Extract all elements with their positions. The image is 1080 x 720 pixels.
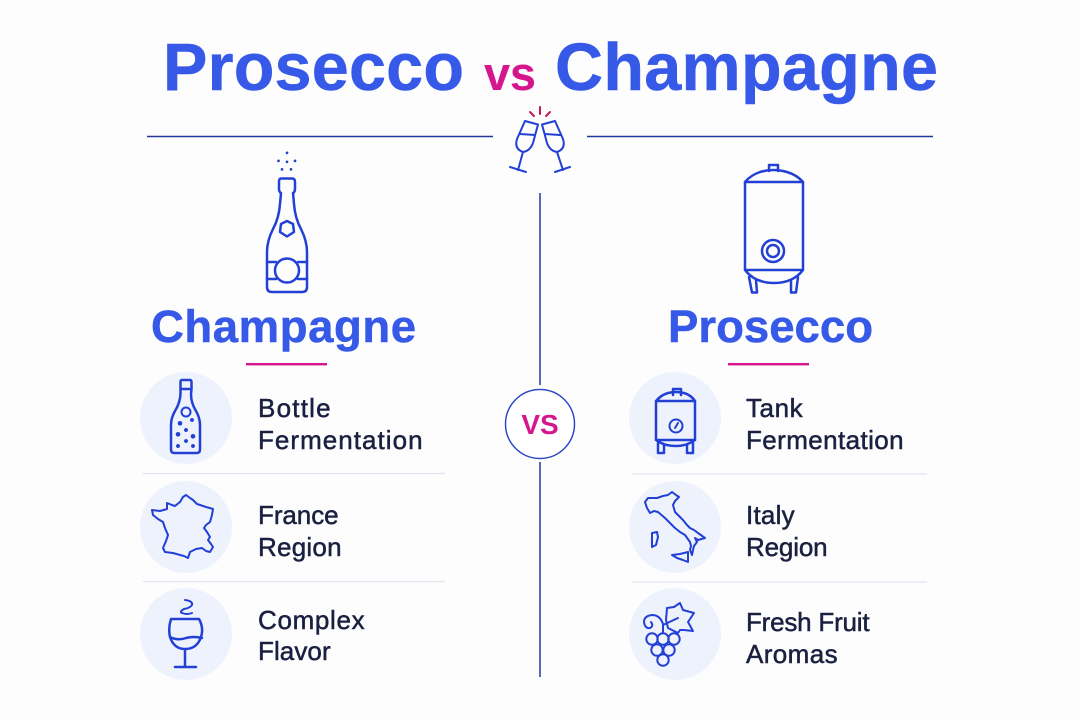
panel: prosecco	[629, 165, 927, 680]
item: france region: Region	[258, 532, 342, 562]
item: fresh fruit aromas	[629, 588, 870, 680]
item: bottle fermentation: Bottle	[258, 393, 331, 423]
vs badge: VS	[521, 409, 559, 440]
title	[163, 31, 938, 105]
item: complex flavor	[140, 588, 365, 680]
icon: clinking glasses	[510, 107, 570, 172]
item: france region	[140, 481, 342, 573]
item: complex flavor: Flavor	[258, 636, 331, 666]
item: italy region: Italy	[746, 500, 795, 530]
item: fresh fruit aromas: Fresh Fruit	[746, 607, 870, 637]
title: Prosecco	[163, 31, 464, 105]
item: bottle fermentation	[140, 372, 423, 464]
item: france region: France	[258, 500, 339, 530]
item: italy region: Region	[746, 532, 828, 562]
vs badge	[506, 390, 574, 458]
item: italy region	[629, 481, 828, 573]
item: bottle fermentation: Fermentation	[258, 425, 423, 455]
title: Champagne	[555, 31, 938, 105]
panel: champagne	[140, 152, 445, 680]
icon: steel tank	[745, 165, 803, 292]
icon: champagne bottle with bubbles	[267, 152, 307, 292]
heading: champagne: Champagne	[151, 301, 416, 352]
title: vs	[484, 47, 536, 100]
item: fresh fruit aromas: Aromas	[746, 639, 838, 669]
item: tank fermentation: Tank	[746, 393, 804, 423]
item: tank fermentation	[629, 372, 904, 464]
heading: prosecco: Prosecco	[668, 301, 873, 352]
item: tank fermentation: Fermentation	[746, 425, 904, 455]
item: complex flavor: Complex	[258, 605, 365, 635]
